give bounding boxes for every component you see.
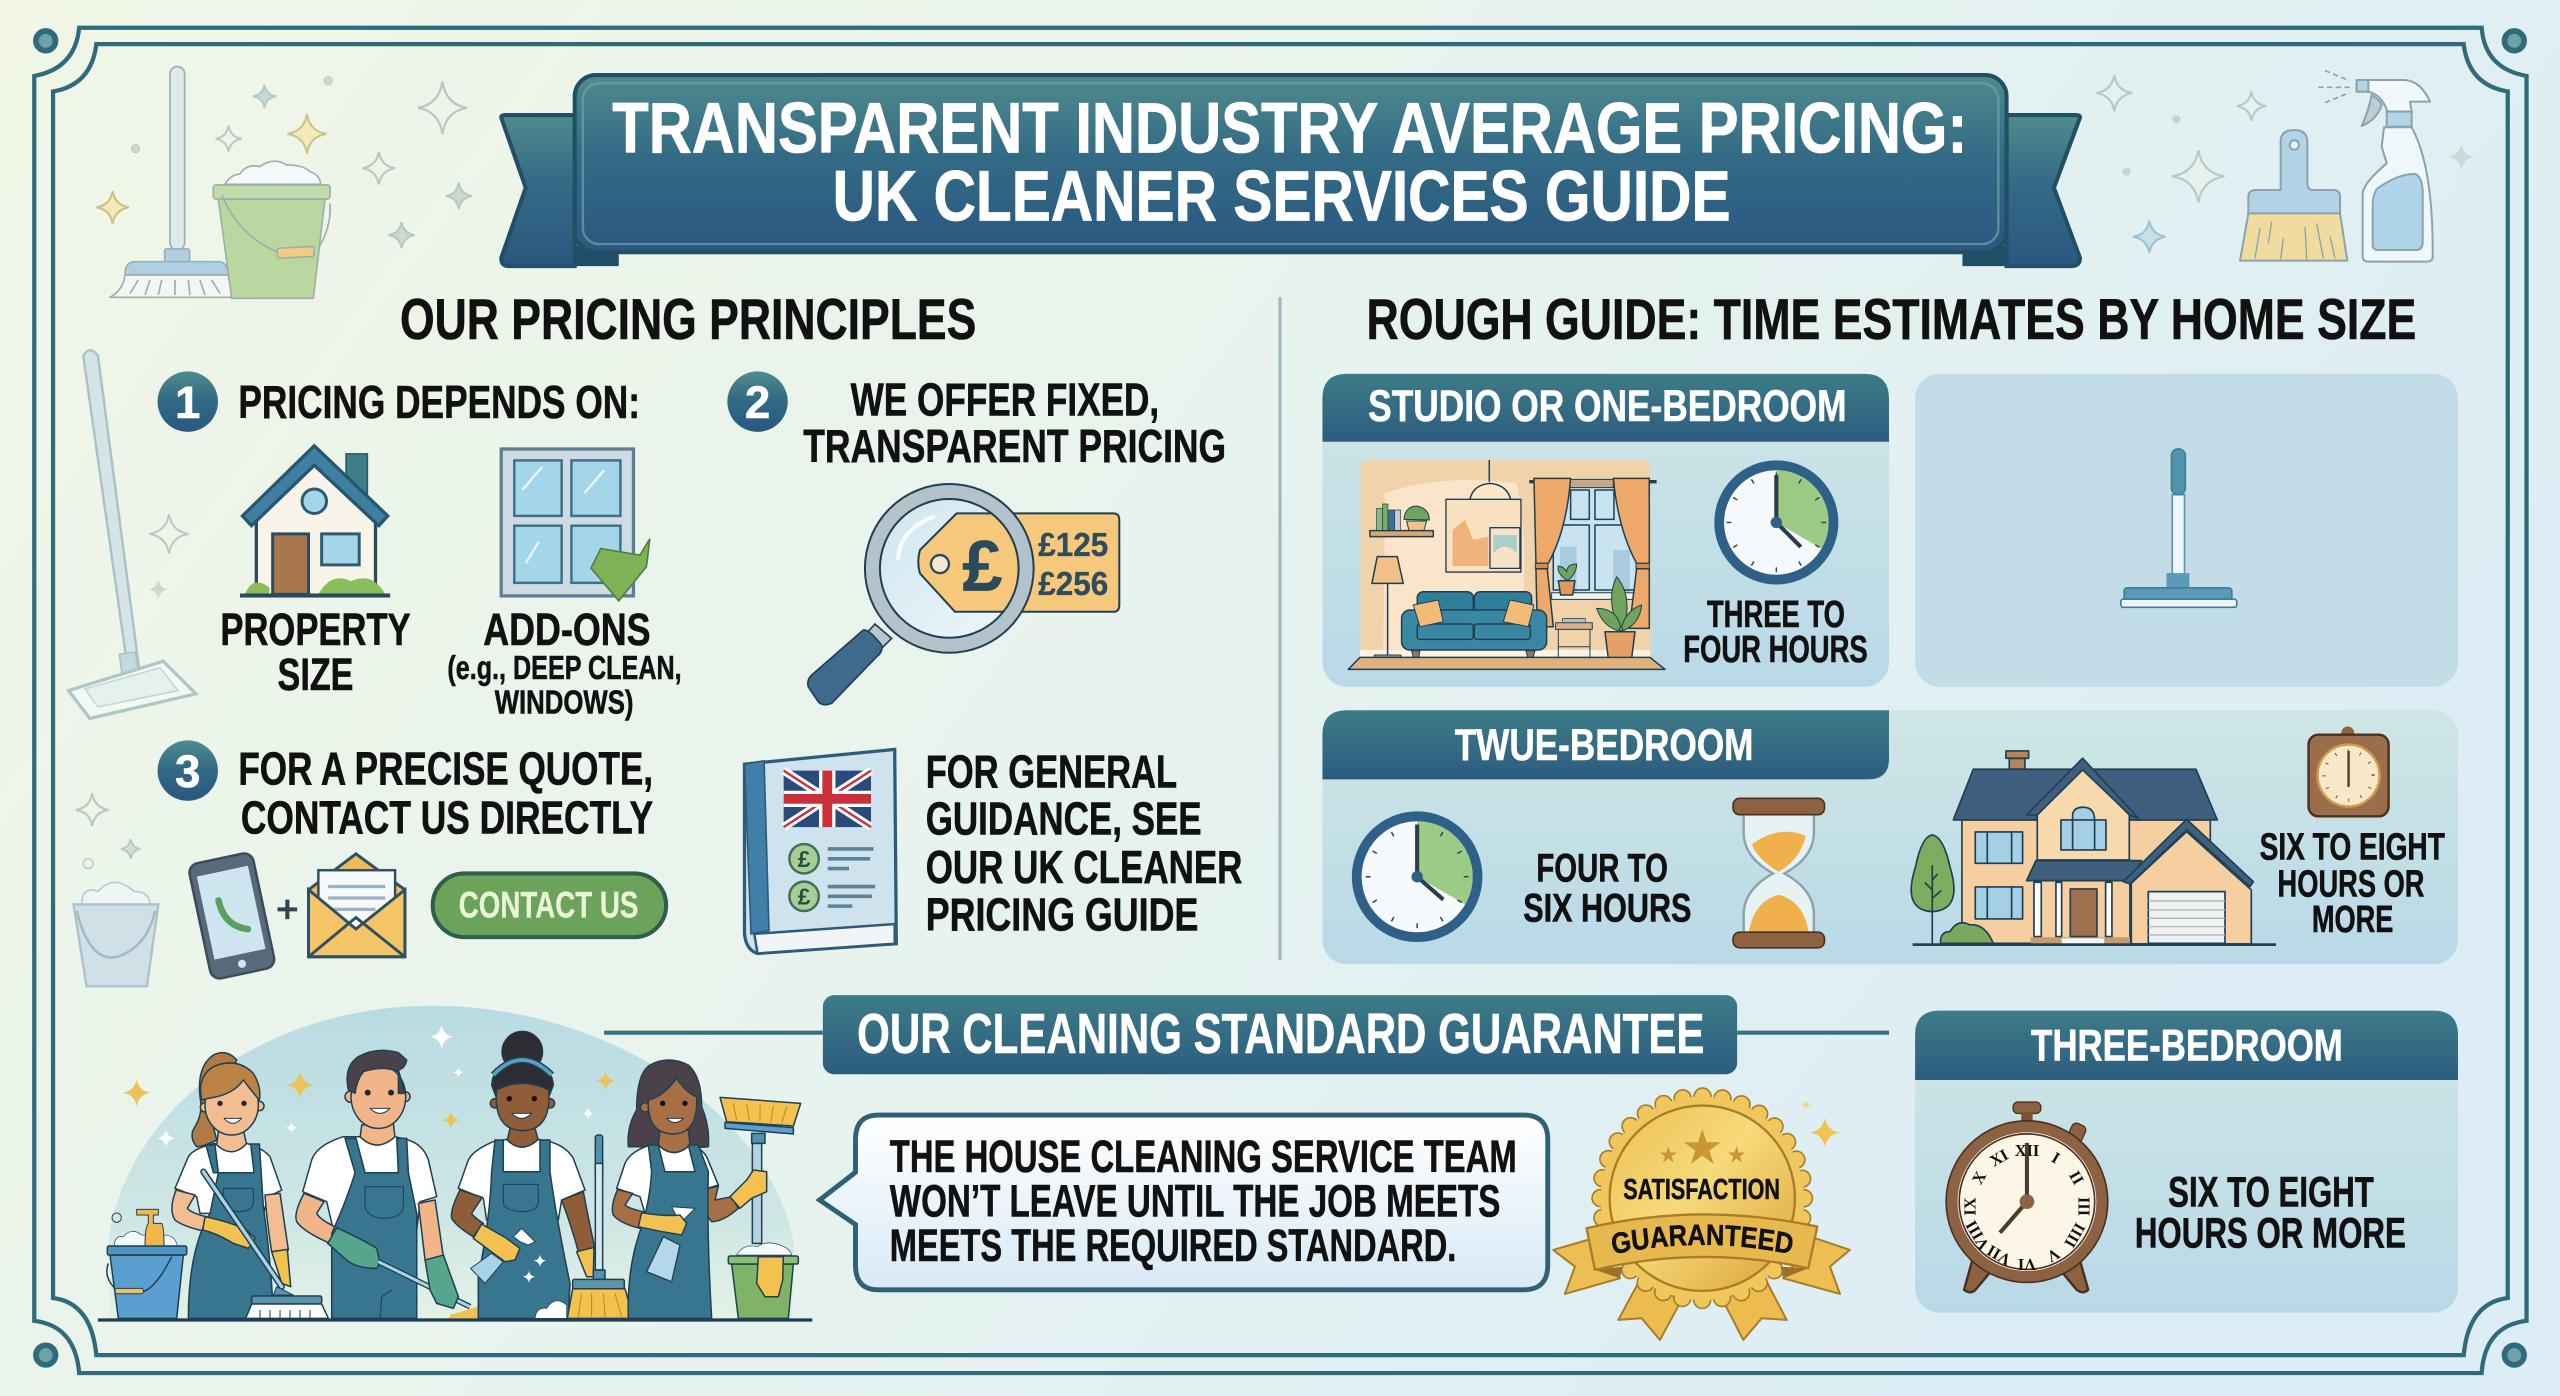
principle 3 text: CONTACT US DIRECTLY	[241, 791, 653, 843]
label: six to eight hours or more: SIX TO EIGHT	[2260, 826, 2445, 868]
label: four to six hours: SIX HOURS	[1523, 887, 1691, 931]
icon: antique clock: X	[1968, 1168, 1990, 1188]
satisfaction guaranteed badge: GUARANTEED	[1612, 1224, 1793, 1254]
icon: antique clock: I	[2048, 1148, 2063, 1168]
icon: window with tag	[501, 449, 650, 601]
label: six to eight hours or more: MORE	[2312, 898, 2393, 940]
panel header: THREE-BEDROOM	[2031, 1021, 2343, 1070]
title text: TRANSPARENT INDUSTRY AVERAGE PRICING:	[612, 90, 1967, 169]
icon: phone	[188, 852, 276, 980]
icon: antique clock: II	[2065, 1167, 2088, 1188]
icon: hourglass	[1733, 798, 1824, 948]
pricing guide	[744, 746, 1242, 953]
panel: two-bedroom	[1322, 710, 2458, 964]
principle 2 text: TRANSPARENT PRICING	[803, 420, 1226, 472]
person 1 and blue bucket	[107, 1053, 328, 1318]
satisfaction guaranteed badge	[1552, 1087, 1851, 1341]
panel header	[1915, 1011, 2458, 1080]
pricing guide text: PRICING GUIDE	[926, 889, 1198, 941]
icon: brush and spray bottle top right	[2096, 71, 2474, 262]
icon: house	[240, 446, 390, 598]
icon: faded bucket lower left	[73, 793, 158, 986]
number badge 2	[727, 371, 788, 432]
icon: antique clock: XII	[2015, 1141, 2039, 1160]
label: add-ons: WINDOWS)	[495, 684, 633, 721]
label: six to eight hours or more: HOURS OR	[2278, 862, 2424, 904]
icon: antique clock: VII	[1984, 1241, 2014, 1270]
icon: antique clock: IX	[1961, 1197, 1980, 1216]
label: six to eight hours or more: HOURS OR MORE	[2135, 1209, 2406, 1256]
principle 2 text: WE OFFER FIXED,	[851, 374, 1159, 426]
icon: antique clock	[1946, 1102, 2108, 1292]
icon: faded mop and bucket top left	[110, 67, 330, 298]
icon: magnifier with price tag: £256	[1038, 566, 1108, 603]
pricing guide text: GUIDANCE, SEE	[926, 792, 1202, 844]
icon: UK guide book: £	[798, 846, 811, 872]
label: six to eight hours or more	[2260, 826, 2445, 940]
title text	[612, 90, 1967, 236]
label: property size: PROPERTY	[220, 604, 411, 655]
banner plate	[575, 75, 2007, 252]
number badge 3	[158, 740, 218, 801]
panel: empty with squeegee	[1915, 374, 2458, 687]
principle 3	[158, 740, 666, 980]
icon: antique clock: VIII	[1961, 1217, 1993, 1254]
person 2	[296, 1050, 480, 1318]
person 4, broom and green bucket	[612, 1060, 801, 1318]
principle 3 text	[238, 742, 653, 843]
label: property size	[220, 604, 411, 700]
satisfaction guaranteed badge: SATISFACTION	[1623, 1174, 1780, 1206]
speech bubble: THE HOUSE CLEANING SERVICE TEAM	[890, 1131, 1517, 1182]
number badge 3: 3	[175, 746, 200, 797]
label: add-ons: (e.g., DEEP CLEAN,	[447, 650, 682, 687]
illustration: cleaning team	[98, 1006, 812, 1322]
icon: antique clock: III	[2074, 1197, 2093, 1216]
pricing guide text	[926, 746, 1242, 941]
panel header	[1322, 710, 1889, 779]
ribbon tail right	[2007, 115, 2080, 266]
panel header	[1322, 374, 1889, 442]
icon: UK guide book: £	[798, 883, 811, 909]
panel header: TWUE-BEDROOM	[1455, 721, 1753, 770]
icon: UK guide book	[744, 749, 896, 953]
speech bubble: WON’T LEAVE UNTIL THE JOB MEETS	[890, 1175, 1500, 1226]
pricing guide text: OUR UK CLEANER	[926, 841, 1242, 893]
speech bubble: MEETS THE REQUIRED STANDARD.	[890, 1220, 1456, 1271]
illustration: two-storey house	[1911, 751, 2276, 946]
icon: antique clock: V	[2043, 1244, 2063, 1267]
icon: clock four to six hours	[1357, 816, 1478, 937]
principle 2 text	[803, 374, 1226, 472]
label: three to four hours: THREE TO	[1707, 593, 1845, 635]
icon: squeegee	[2121, 449, 2237, 607]
person 3	[450, 1031, 657, 1318]
label: add-ons	[447, 604, 682, 721]
heading: our pricing principles: OUR PRICING PRINCIPLES	[400, 288, 976, 352]
label: six to eight hours or more: SIX TO EIGHT	[2168, 1169, 2374, 1216]
icon: small clock	[2309, 727, 2389, 816]
principle 3 text: FOR A PRECISE QUOTE,	[238, 742, 653, 794]
illustration: living room	[1348, 460, 1665, 669]
label: property size: SIZE	[278, 649, 353, 700]
title text: UK CLEANER SERVICES GUIDE	[833, 157, 1731, 236]
label: add-ons: ADD-ONS	[483, 604, 651, 655]
ribbon tail left	[501, 115, 575, 266]
plus sign	[278, 900, 297, 919]
label: three to four hours: FOUR HOURS	[1683, 628, 1868, 670]
icon: antique clock: IIII	[2060, 1220, 2090, 1251]
contact us button	[433, 873, 666, 937]
sparkles around team	[123, 1024, 615, 1147]
icon: clock three to four hours	[1719, 465, 1833, 580]
icon: antique clock: XI	[1986, 1145, 2011, 1170]
vertical divider	[1278, 297, 1282, 960]
principle 2	[727, 371, 1226, 705]
number badge 1	[158, 371, 218, 432]
icon: antique clock: VI	[2018, 1255, 2036, 1274]
icon: faded mop left side	[69, 350, 196, 718]
principle 1	[158, 371, 682, 721]
icon: magnifier with price tag: £	[962, 527, 1002, 607]
guarantee heading	[604, 995, 1889, 1074]
panel: three-bedroom	[1915, 1011, 2458, 1313]
pricing guide text: FOR GENERAL	[926, 746, 1177, 798]
label: three to four hours	[1683, 593, 1868, 670]
principle 1 text: PRICING DEPENDS ON:	[238, 376, 640, 428]
number badge 2: 2	[745, 377, 770, 428]
icon: envelope	[309, 854, 405, 957]
icon: magnifier with price tag	[808, 484, 1119, 705]
speech bubble	[820, 1115, 1548, 1290]
panel header: STUDIO OR ONE-BEDROOM	[1368, 382, 1847, 431]
icon: magnifier with price tag: £125	[1038, 527, 1108, 564]
label: four to six hours: FOUR TO	[1536, 847, 1668, 891]
sparkles top left	[96, 77, 472, 248]
label: four to six hours	[1523, 847, 1691, 931]
label: six to eight hours or more	[2135, 1169, 2406, 1256]
title banner	[501, 75, 2080, 266]
guarantee heading: OUR CLEANING STANDARD GUARANTEE	[857, 1002, 1704, 1065]
panel: studio or one-bedroom	[1322, 374, 1889, 687]
contact us button: CONTACT US	[459, 885, 638, 926]
number badge 1: 1	[175, 377, 200, 428]
